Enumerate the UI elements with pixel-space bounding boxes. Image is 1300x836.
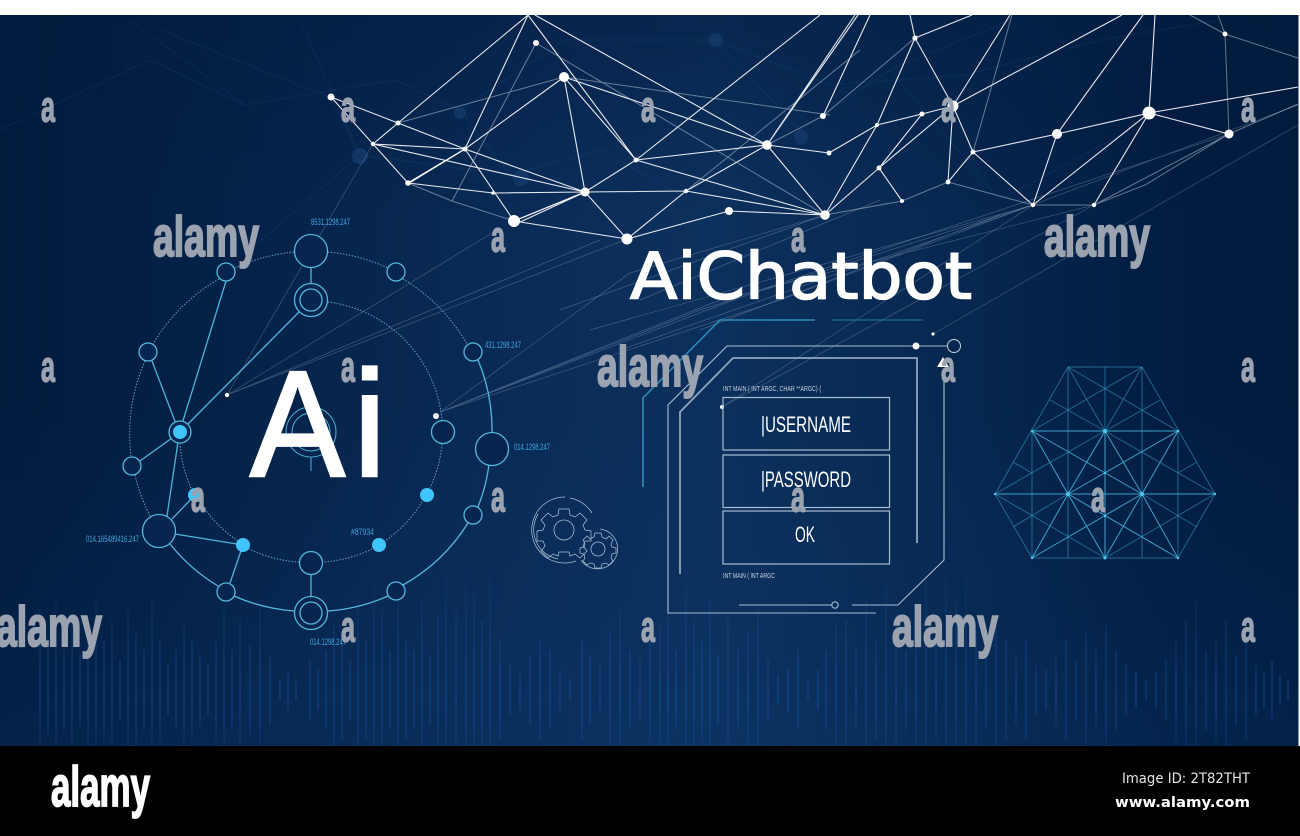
username field: |USERNAME bbox=[761, 412, 851, 437]
IP labels bbox=[86, 217, 550, 647]
small watermark letters: a bbox=[1241, 602, 1255, 652]
mesh lines bright bbox=[331, 15, 1298, 239]
watermark logos: alamy bbox=[597, 335, 703, 399]
small watermark letters: a bbox=[1091, 472, 1105, 522]
small watermark letters: a bbox=[491, 212, 505, 262]
small watermark letters: a bbox=[791, 212, 805, 262]
outer frame bbox=[668, 346, 948, 613]
dim outer lines bbox=[995, 367, 1215, 558]
small watermark letters bbox=[41, 82, 1255, 652]
footer logo: alamy bbox=[51, 755, 150, 819]
IP labels: 8531.1298.247 bbox=[311, 217, 350, 227]
gears icon bbox=[532, 497, 618, 569]
network graph: top polygon mesh bbox=[328, 15, 1298, 244]
site url: www.alamy.com bbox=[1115, 795, 1250, 811]
central target icon bbox=[286, 407, 336, 471]
top white strip bbox=[0, 0, 1300, 15]
password field: |PASSWORD bbox=[761, 467, 851, 492]
bottom slider bbox=[739, 602, 838, 608]
ok button bbox=[723, 511, 890, 564]
watermark logos: alamy bbox=[0, 595, 102, 659]
IP labels: #87934 bbox=[351, 527, 374, 537]
image id: Image ID: 2T82THT bbox=[1122, 771, 1250, 787]
mesh nodes bbox=[328, 32, 1234, 244]
small watermark letters: a bbox=[341, 82, 355, 132]
hexagon geometric icon bbox=[994, 367, 1216, 560]
small watermark letters: a bbox=[941, 342, 955, 392]
circular Ai network diagram bbox=[86, 217, 550, 647]
small gear bbox=[580, 533, 616, 568]
right frame bbox=[852, 368, 944, 605]
cyan accent lines bbox=[643, 320, 923, 487]
inner frame bbox=[680, 358, 917, 574]
ring nodes bbox=[123, 234, 508, 630]
small watermark letters: a bbox=[41, 82, 55, 132]
small watermark letters: a bbox=[1241, 82, 1255, 132]
white end right bbox=[433, 413, 439, 419]
small watermark letters: a bbox=[791, 472, 805, 522]
filled cyan nodes bbox=[173, 425, 434, 552]
small watermark letters: a bbox=[641, 82, 655, 132]
small watermark letters: a bbox=[941, 82, 955, 132]
IP labels: 431.1298.247 bbox=[485, 340, 521, 350]
bottom glow bbox=[0, 400, 1298, 746]
bright inner lines bbox=[995, 431, 1215, 558]
watermark logos bbox=[0, 205, 1150, 659]
long thin light rays bbox=[227, 105, 1298, 412]
small watermark letters: a bbox=[641, 602, 655, 652]
password field bbox=[723, 455, 890, 508]
IP labels: 014.1298.247 bbox=[310, 637, 346, 647]
login panel bbox=[643, 320, 960, 613]
title: AiChatbot bbox=[630, 240, 972, 314]
top shade bbox=[0, 15, 1298, 215]
Ai big label: A bbox=[250, 339, 345, 508]
small watermark letters: a bbox=[341, 342, 355, 392]
large gear bbox=[537, 509, 591, 558]
IP labels: 014.1298.247 bbox=[514, 442, 550, 452]
username field bbox=[723, 398, 890, 450]
hexagon nodes bbox=[994, 429, 1216, 560]
small watermark letters: a bbox=[191, 472, 205, 522]
IP labels: 014.165489416.247 bbox=[86, 534, 139, 544]
right white edge bbox=[1298, 15, 1300, 746]
watermark logos: alamy bbox=[892, 595, 998, 659]
small watermark letters: a bbox=[491, 472, 505, 522]
code caption top: INT MAIN ( INT ARGC, CHAR **ARGC) { bbox=[723, 384, 821, 393]
black footer bar bbox=[0, 746, 1300, 836]
solid outer ring bbox=[170, 360, 492, 611]
small watermark letters: a bbox=[1241, 342, 1255, 392]
connector lines bbox=[140, 268, 311, 597]
dotted rings bbox=[130, 252, 467, 562]
ok button: OK bbox=[795, 522, 815, 547]
watermark logos: alamy bbox=[1044, 205, 1150, 269]
faint background network bbox=[0, 20, 1220, 250]
small watermark letters: a bbox=[41, 342, 55, 392]
watermark logos: alamy bbox=[153, 205, 259, 269]
Ai big label: i bbox=[353, 339, 387, 508]
small watermark letters: a bbox=[341, 602, 355, 652]
white ends bbox=[225, 393, 229, 397]
spectrum bars bbox=[40, 540, 1288, 746]
frame nodes bbox=[720, 332, 960, 409]
code caption bottom: INT MAIN ( INT ARGC bbox=[723, 571, 775, 580]
mesh lines dim bbox=[398, 15, 1298, 221]
